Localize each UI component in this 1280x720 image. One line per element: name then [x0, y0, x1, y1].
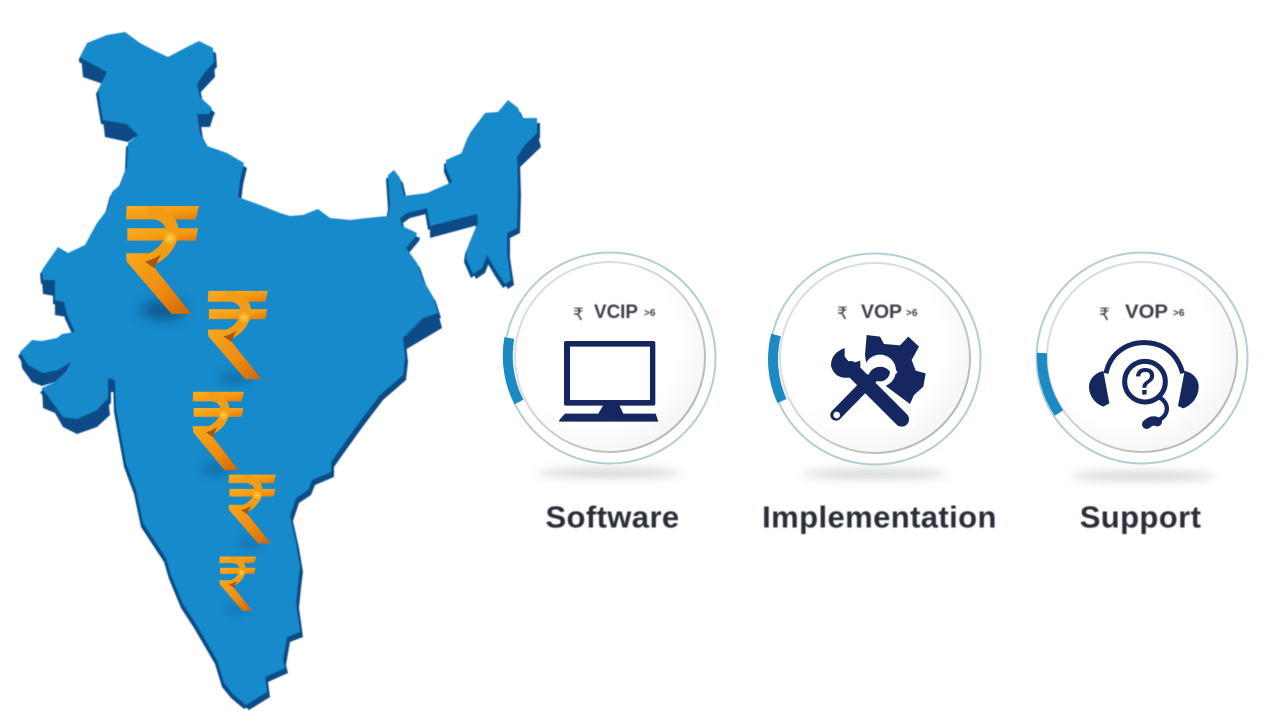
label: Implementation: Implementation — [762, 500, 997, 534]
icon: computer monitor — [559, 341, 658, 422]
icon: rupee 4 — [229, 475, 276, 543]
label: Software: Software — [545, 500, 680, 534]
badge text: ₹ — [573, 305, 584, 324]
map of India — [18, 32, 541, 710]
badge text: ₹ — [837, 304, 848, 323]
icon: support headset — [1089, 343, 1199, 424]
badge text — [1099, 302, 1185, 324]
label: Support: Support — [1080, 500, 1201, 534]
icon: support headset: ? — [1135, 361, 1155, 402]
panel: software — [504, 252, 716, 534]
badge text: ₹ — [1099, 305, 1110, 324]
icon: rupee 5 — [219, 557, 256, 611]
badge text: VOP — [861, 302, 902, 323]
badge text: >6 — [1173, 308, 1185, 319]
icon: rupee 3 — [193, 392, 244, 470]
badge ring — [504, 252, 716, 464]
map top face — [20, 32, 537, 705]
map side walls — [18, 36, 541, 710]
floor shadow — [538, 468, 682, 478]
icon: wrench and gear — [831, 335, 926, 422]
floor shadow — [1071, 471, 1215, 481]
badge text — [573, 302, 656, 324]
floor shadow — [803, 469, 947, 479]
badge text: >6 — [906, 308, 918, 319]
progress arc — [1042, 353, 1059, 413]
badge text — [837, 302, 918, 323]
badge ring — [1036, 252, 1248, 464]
rupee shadows — [141, 301, 262, 614]
progress arc — [773, 335, 782, 401]
icon: rupee 2 — [208, 291, 268, 379]
badge text: VOP — [1125, 302, 1168, 323]
panel: implementation — [762, 254, 997, 534]
icon: large rupee 1 — [126, 206, 199, 314]
badge text: VCIP — [594, 302, 638, 323]
progress arc — [508, 338, 519, 402]
badge text: >6 — [644, 308, 656, 319]
badge ring — [770, 254, 980, 464]
panel: support — [1036, 252, 1248, 534]
